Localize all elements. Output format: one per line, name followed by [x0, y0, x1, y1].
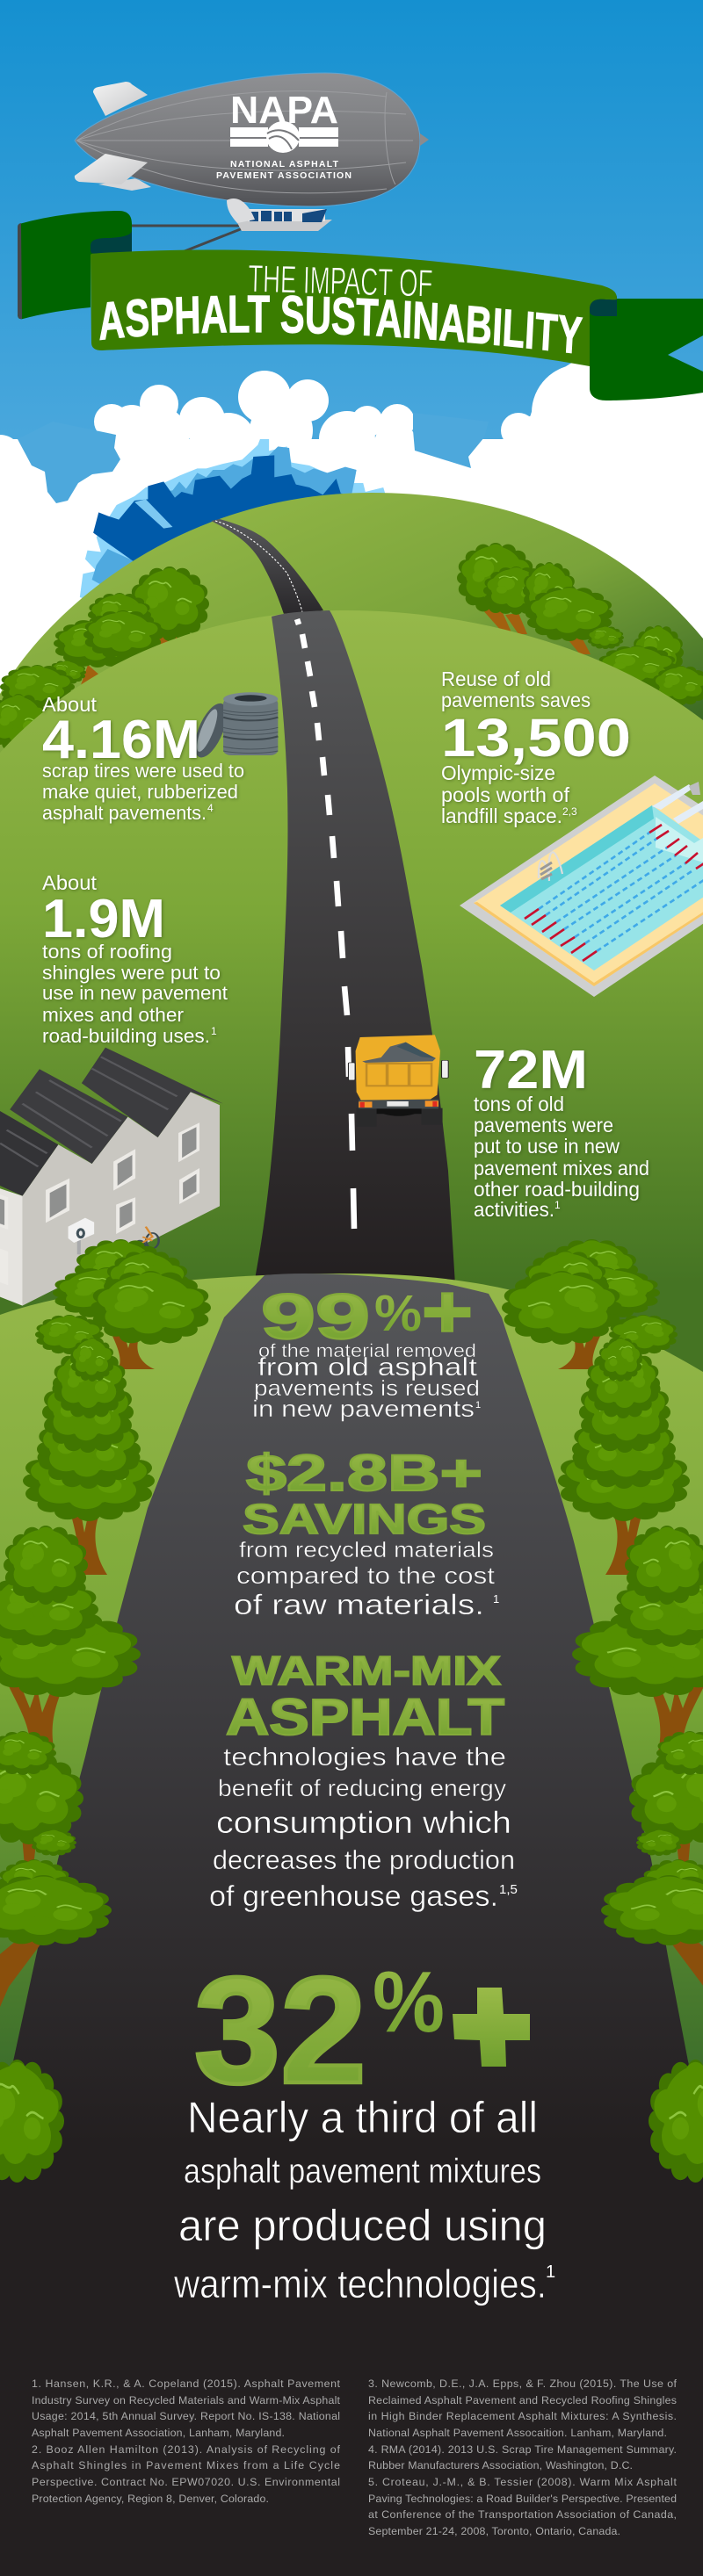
stat: 4.16M scrap tires [42, 693, 244, 824]
gondola [227, 198, 332, 231]
stat: 1.9M roofing shingles: About [42, 871, 98, 894]
tow cables [130, 226, 243, 253]
references, right column [368, 2378, 678, 2537]
references, right column: Reclaimed Asphalt Pavement and Recycled Roofing Shingles [368, 2394, 677, 2406]
stat: $2.8B+ savings: 1 [493, 1592, 499, 1605]
stat: 4.16M scrap tires: scrap tires were used to [42, 760, 244, 782]
stat: warm-mix asphalt: consumption which [216, 1806, 511, 1840]
stat: 99% reused: pavements is reused [254, 1376, 480, 1401]
references, left column: 2. Booz Allen Hamilton (2013). Analysis of Recycling of [32, 2443, 341, 2456]
stat: 13,500 olympic pools: pavements saves [441, 689, 591, 711]
references, left column: Asphalt Shingles in Pavement Mixes from a Life Cycle [32, 2459, 340, 2471]
stat: 99% reused: + [422, 1270, 473, 1353]
stat: 1.9M roofing shingles: road-building uses. [42, 1025, 210, 1047]
references, left column [32, 2378, 341, 2505]
stat: 13,500 olympic pools: 2,3 [562, 805, 577, 818]
icon: yellow dump truck [348, 1035, 448, 1127]
stat: 4.16M scrap tires: make quiet, rubberized [42, 781, 238, 803]
stat: 4.16M scrap tires: 4.16M [42, 710, 200, 770]
sky pocket left [18, 422, 120, 503]
stat: 1.9M roofing shingles: use in new pavement [42, 982, 228, 1004]
stat: 99% reused: in new pavements [252, 1396, 475, 1422]
plus sign [453, 1988, 530, 2067]
city skyline [80, 439, 386, 615]
icon: row of houses [0, 1048, 223, 1306]
references, right column: in High Binder Replacement Asphalt Mixtures: A Synthesis. [368, 2410, 677, 2422]
stat: 72M old pavements: put to use in new [474, 1135, 620, 1158]
stat: warm-mix asphalt: ASPHALT [226, 1689, 504, 1746]
title: asphalt sustainability: ASPHALT SUSTAINABILITY [99, 295, 583, 353]
stat: 4.16M scrap tires: About [42, 693, 98, 716]
stat: 1.9M roofing shingles: 1.9M [42, 889, 165, 949]
air conditioner [69, 1218, 94, 1254]
stat: $2.8B+ savings: $2.8B+ [246, 1445, 482, 1502]
NAPA logo: NAPA [230, 89, 338, 132]
references, right column: National Asphalt Pavement Assocaition. Lanham, Maryland. [368, 2427, 667, 2439]
banner right tail [590, 295, 703, 400]
stat: 32% warm-mix share: Nearly a third of all [187, 2093, 538, 2142]
lane dashes [297, 619, 354, 1229]
references, right column: at Conference of the Transportation Association of Canada, [368, 2508, 677, 2521]
stat: 4.16M scrap tires: asphalt pavements. [42, 802, 207, 824]
stat: 72M old pavements: activities. [474, 1198, 554, 1221]
stat: warm-mix asphalt: technologies have the [223, 1743, 506, 1771]
icon: stack of tires [188, 692, 278, 760]
stat: 1.9M roofing shingles [42, 871, 228, 1047]
main road on front hill [254, 610, 455, 1285]
stat: 13,500 olympic pools: landfill space. [441, 805, 562, 827]
stat: 99% reused: of the material removed [258, 1341, 476, 1361]
stat: 13,500 olympic pools: 13,500 [441, 708, 631, 768]
stat: 32% warm-mix share: warm-mix technologies. [173, 2262, 547, 2306]
stat: 72M old pavements: pavement mixes and [474, 1157, 649, 1180]
stat: $2.8B+ savings: compared to the cost [236, 1562, 496, 1589]
stat: 72M old pavements [474, 1040, 649, 1221]
NAPA logo [216, 89, 352, 181]
stat: 1.9M roofing shingles: tons of roofing [42, 941, 172, 963]
stat: 32% warm-mix share: are produced using [178, 2201, 547, 2250]
stat: 1.9M roofing shingles: mixes and other [42, 1004, 184, 1026]
stat: 32% warm-mix share: asphalt pavement mixtures [184, 2153, 541, 2190]
starting blocks [652, 782, 703, 824]
stat: 99% reused [252, 1270, 481, 1422]
references, left column: Usage: 2014, 5th Annual Survey. Report No. IS-138. National [32, 2410, 340, 2422]
references, left column: Protection Agency, Region 8, Denver, Colorado. [32, 2493, 269, 2505]
front hill [0, 610, 703, 1405]
stat: 1.9M roofing shingles: 1 [211, 1025, 217, 1037]
lower road [0, 1274, 703, 2576]
stat: $2.8B+ savings: SAVINGS [243, 1497, 486, 1543]
references, right column: Rubber Manufacturers Association, Washington, D.C. [368, 2459, 633, 2471]
stat: 99% reused: 99 [261, 1282, 370, 1353]
far road on back hill [211, 519, 323, 617]
stat: 99% reused: 1 [475, 1400, 481, 1411]
references, left column: Perspective. Contract No. EPW07020. U.S. Environmental [32, 2476, 340, 2488]
pool ladder [539, 852, 562, 881]
banner left tail [18, 211, 132, 319]
lower hill [0, 1274, 703, 2576]
stat: $2.8B+ savings [234, 1445, 499, 1620]
stat: warm-mix asphalt [209, 1648, 518, 1912]
references, right column: 5. Croteau, J.-M., & B. Tessier (2008). Warm Mix Asphalt [368, 2476, 678, 2488]
references, right column: Paving Technologies: a Road Builder's Perspective. Presented [368, 2493, 677, 2505]
stat: 32% warm-mix share [173, 1946, 555, 2306]
references, left column: 1. Hansen, K.R., & A. Copeland (2015). Asphalt Pavement [32, 2378, 341, 2390]
stat: warm-mix asphalt: 1,5 [499, 1882, 518, 1897]
stat: 13,500 olympic pools: Olympic-size [441, 761, 555, 784]
stat: 1.9M roofing shingles: shingles were put to [42, 962, 221, 984]
stat: 99% reused: from old asphalt [257, 1353, 477, 1382]
stat: 72M old pavements: pavements were [474, 1114, 613, 1136]
blimp [75, 73, 429, 231]
stat: 13,500 olympic pools: Reuse of old [441, 667, 551, 690]
stat: 4.16M scrap tires: 4 [207, 802, 214, 814]
back hill [0, 493, 703, 790]
stat: 32% warm-mix share: 32 [194, 1946, 366, 2115]
sky background [0, 0, 703, 545]
stat: warm-mix asphalt: decreases the production [213, 1844, 515, 1875]
stat: warm-mix asphalt: benefit of reducing energy [218, 1775, 507, 1801]
stat: 13,500 olympic pools: pools worth of [441, 783, 570, 806]
icon: swimming pool [460, 776, 703, 997]
stat: warm-mix asphalt: of greenhouse gases. [209, 1880, 498, 1912]
trees on back hill [0, 543, 703, 751]
trees along road, left [0, 1239, 211, 2183]
NAPA logo: NATIONAL ASPHALT [230, 159, 339, 170]
bicycle [134, 1227, 159, 1253]
stat: $2.8B+ savings: from recycled materials [239, 1538, 494, 1562]
clouds [0, 351, 703, 808]
blimp envelope [75, 73, 420, 206]
references, left column: Asphalt Pavement Association, Lanham, Maryland. [32, 2427, 285, 2439]
references, left column: Industry Survey on Recycled Materials and Warm-Mix Asphalt [32, 2394, 341, 2406]
banner main ribbon [91, 249, 617, 366]
stat: 99% reused: % [374, 1285, 422, 1342]
NAPA logo: PAVEMENT ASSOCIATION [216, 170, 352, 181]
stat: 72M old pavements: other road-building [474, 1178, 640, 1201]
trees along road, right [502, 1239, 703, 2183]
stat: warm-mix asphalt: WARM-MIX [232, 1648, 501, 1693]
sky pocket right [413, 413, 489, 468]
stat: 13,500 olympic pools [441, 667, 631, 827]
stat: $2.8B+ savings: of raw materials. [234, 1589, 484, 1620]
stat: 32% warm-mix share: 1 [546, 2262, 555, 2282]
stat: 32% warm-mix share: % [373, 1953, 445, 2050]
references, right column: 4. RMA (2014). 2013 U.S. Scrap Tire Management Summary. [368, 2443, 677, 2456]
blimp fins [93, 82, 151, 191]
references, right column: 3. Newcomb, D.E., J.A. Epps, & F. Zhou (2015). The Use of [368, 2378, 678, 2390]
references, right column: September 21-24, 2008, Toronto, Ontario, Canada. [368, 2525, 620, 2537]
stat: 72M old pavements: tons of old [474, 1093, 564, 1115]
title: the impact of: THE IMPACT OF [248, 257, 433, 306]
stat: 72M old pavements: 72M [474, 1040, 588, 1100]
stat: 72M old pavements: 1 [554, 1199, 561, 1211]
